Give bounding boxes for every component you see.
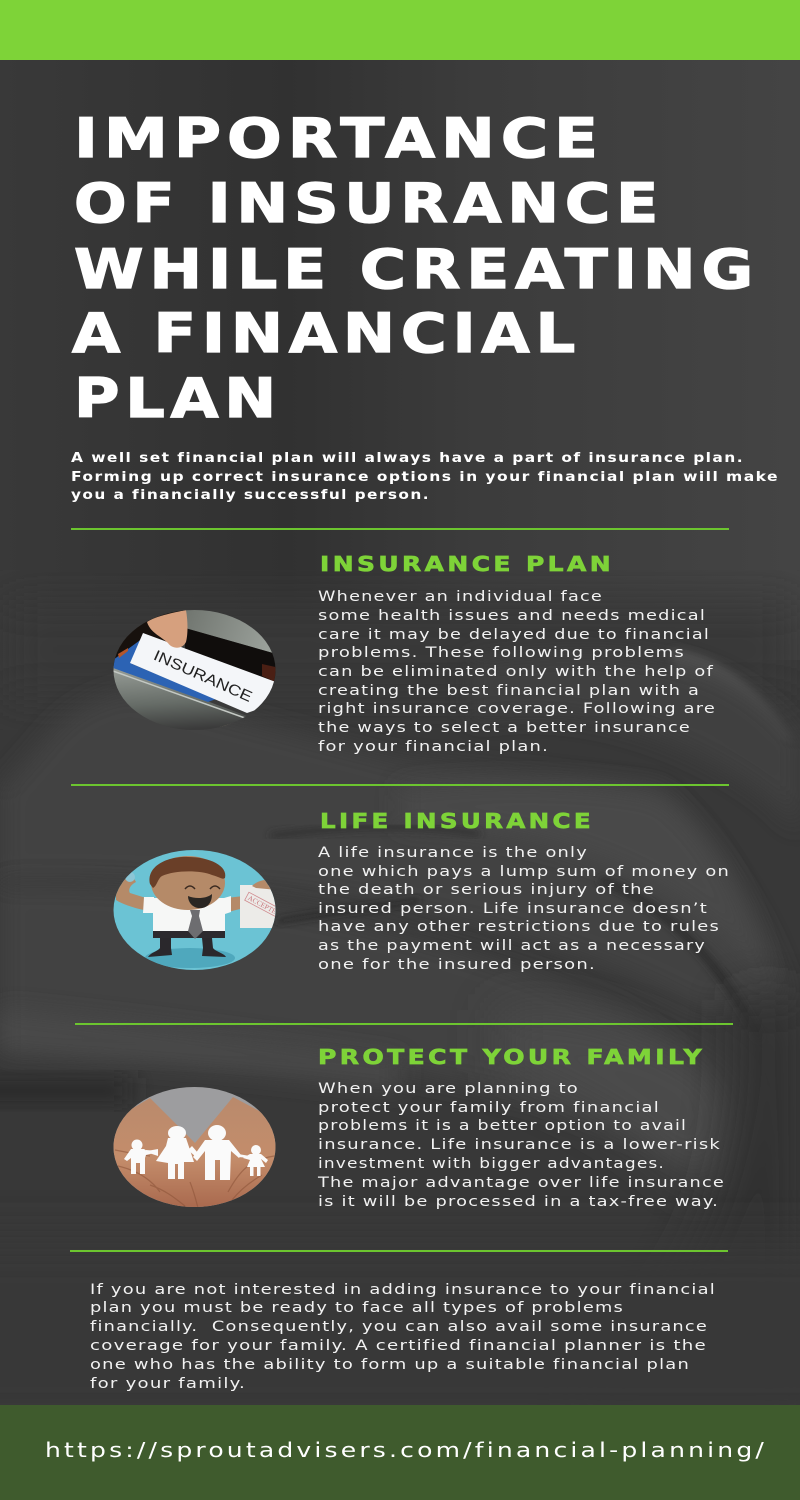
text: closing paragraph [90, 1282, 716, 1392]
heading: protect your family: PROTECT YOUR FAMILY [318, 1045, 705, 1069]
text: closing paragraph: plan you must be ready to face all types of problems [90, 1300, 624, 1316]
text: life insurance body: the death or serious injury of the [318, 882, 655, 898]
text: insurance plan body: creating the best financial plan with a [318, 683, 700, 699]
text: closing paragraph: one who has the ability to form up a suitable financial plan [90, 1357, 690, 1373]
text: closing paragraph: If you are not interested in adding insurance to your financial [90, 1282, 716, 1298]
footer url: https://sproutadvisers.com/financial-planning/ [45, 1438, 767, 1462]
text: protect your family body: protect your family from financial [318, 1100, 660, 1116]
text: protect your family body: The major advantage over life insurance [317, 1175, 725, 1191]
text: life insurance body: A life insurance is the only [318, 845, 588, 861]
icon: insurance folder photo [114, 610, 276, 727]
heading: insurance plan: INSURANCE PLAN [320, 552, 614, 576]
subtitle: you a financially successful person. [71, 488, 430, 503]
text: life insurance body: as the payment will act as a necessary [318, 938, 706, 954]
text: insurance plan body: problems. These following problems [318, 645, 685, 661]
text: insurance plan body: for your financial plan. [318, 739, 549, 755]
text: insurance plan body: some health issues and needs medical [318, 608, 706, 624]
heading: life insurance: LIFE INSURANCE [320, 809, 594, 833]
text: protect your family body: is it will be processed in a tax-free way. [318, 1194, 719, 1210]
icon: insurance folder photo: INSURANCE [151, 647, 255, 706]
text: life insurance body: have any other restrictions due to rules [318, 919, 720, 935]
subtitle: A well set financial plan will always have a part of insurance plan. [71, 451, 744, 466]
title [72, 107, 759, 430]
panel: life insurance [113, 809, 730, 973]
text: life insurance body: one for the insured person. [318, 957, 596, 973]
text: protect your family body: insurance. Life insurance is a lower-risk [318, 1137, 721, 1153]
text: closing paragraph: coverage for your family. A certified financial planner is the [90, 1338, 707, 1354]
text: life insurance body: insured person. Life insurance doesn’t [318, 901, 708, 917]
text: insurance plan body: the ways to select a better insurance [318, 720, 691, 736]
text: protect your family body [317, 1081, 725, 1210]
subtitle [71, 451, 779, 503]
text: insurance plan body: can be eliminated only with the help of [318, 664, 714, 680]
panel: insurance plan [113, 552, 716, 755]
icon: happy man with accepted document [113, 850, 283, 970]
icon: happy man with accepted document: ACCEPTED [246, 894, 282, 918]
title: PLAN [74, 367, 282, 430]
text: insurance plan body: right insurance coverage. Following are [318, 701, 716, 717]
text: closing paragraph: financially. Consequently, you can also avail some insurance [90, 1319, 708, 1335]
text: insurance plan body [318, 589, 716, 755]
text: insurance plan body: Whenever an individual face [318, 589, 603, 605]
text: protect your family body: When you are planning to [318, 1081, 579, 1097]
subtitle: Forming up correct insurance options in your financial plan will make [71, 470, 779, 485]
text: closing paragraph: for your family. [90, 1376, 246, 1392]
title: WHILE CREATING [74, 238, 759, 301]
text: life insurance body: one which pays a lump sum of money on [318, 864, 730, 880]
text: protect your family body: investment with bigger advantages. [318, 1156, 665, 1172]
top green band [0, 0, 800, 60]
footer band [0, 1405, 800, 1500]
title: A FINANCIAL [72, 302, 581, 365]
panel: protect your family [113, 1045, 725, 1210]
text: protect your family body: problems it is a better option to avail [318, 1118, 687, 1134]
title: OF INSURANCE [74, 172, 664, 235]
icon: paper family in cupped hands [113, 1087, 276, 1208]
text: life insurance body [318, 845, 730, 973]
text: insurance plan body: care it may be delayed due to financial [318, 627, 710, 643]
title: IMPORTANCE [74, 107, 604, 170]
